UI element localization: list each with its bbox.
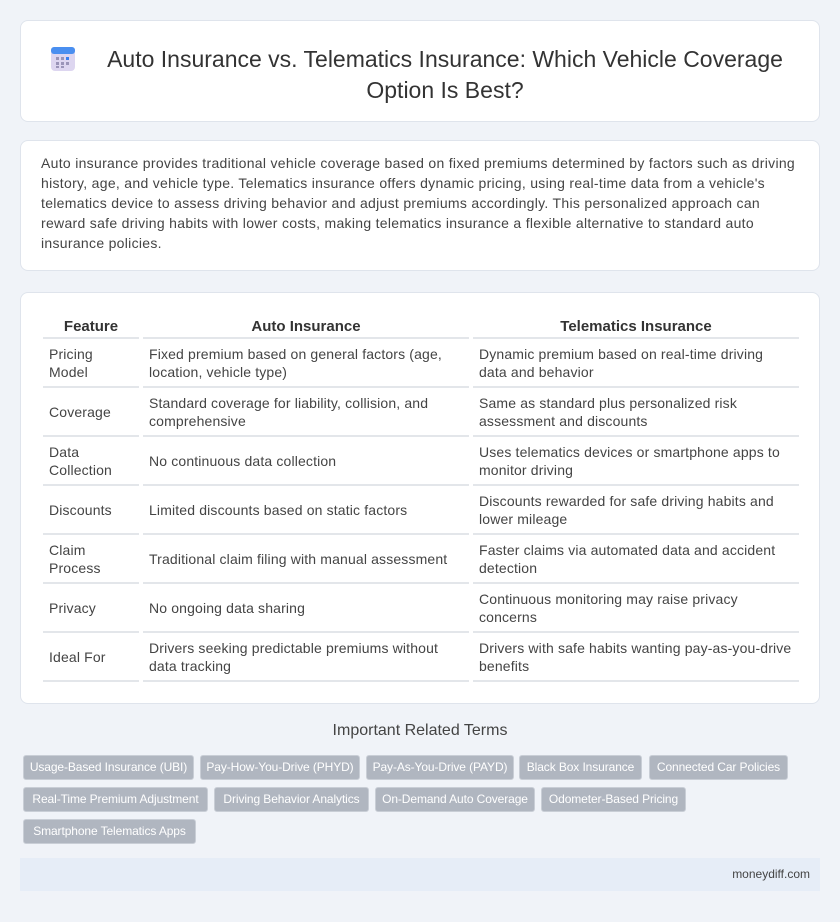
comparison table: Privacy xyxy=(49,600,96,616)
comparison table: Pricing Model xyxy=(49,346,93,380)
related terms tags: Connected Car Policies xyxy=(657,760,780,774)
related terms tags: Pay-How-You-Drive (PHYD) xyxy=(206,760,354,774)
comparison table: Data Collection xyxy=(49,444,112,478)
comparison table: Continuous monitoring may raise privacy concerns xyxy=(479,590,738,624)
footer xyxy=(20,858,820,891)
related terms tags: Smartphone Telematics Apps xyxy=(33,824,186,838)
icon: calendar xyxy=(51,47,75,71)
comparison table: Auto Insurance xyxy=(251,318,361,335)
comparison table xyxy=(43,318,799,682)
comparison table: Ideal For xyxy=(49,648,106,664)
comparison table: Limited discounts based on static factors xyxy=(149,502,407,518)
title: Auto Insurance vs. Telematics Insurance: Which Vehicle Coverage Option Is Best? xyxy=(107,46,783,103)
related terms tags: Driving Behavior Analytics xyxy=(223,792,360,806)
related terms tags: On-Demand Auto Coverage xyxy=(382,792,528,806)
header card xyxy=(20,20,820,122)
description card xyxy=(20,140,820,271)
footer: moneydiff.com xyxy=(732,867,810,881)
comparison table: Coverage xyxy=(49,404,111,420)
related terms heading: Important Related Terms xyxy=(333,722,507,739)
related terms tags: Usage-Based Insurance (UBI) xyxy=(30,760,187,774)
comparison table card xyxy=(20,292,820,704)
comparison table: Telematics Insurance xyxy=(560,318,712,335)
related terms tags: Black Box Insurance xyxy=(527,760,634,774)
comparison table: Discounts xyxy=(49,502,112,518)
description card: Auto insurance provides traditional vehicle coverage based on fixed premiums determined by factors such as driving history, age, and vehicle type. Telematics insurance offers dynamic pricing, using real-time data from a vehicle's telematics device to assess driving behavior and adjust premiums accordingly. This personalized approach can reward safe driving habits with lower costs, making telematics insurance a flexible alternative to standard auto insurance policies. xyxy=(41,155,795,251)
comparison table: Claim Process xyxy=(49,542,101,576)
comparison table: Drivers with safe habits wanting pay-as-you-drive benefits xyxy=(479,640,791,674)
comparison table: No continuous data collection xyxy=(149,452,336,468)
comparison table: Traditional claim filing with manual assessment xyxy=(149,550,447,566)
comparison table: No ongoing data sharing xyxy=(149,600,305,616)
comparison table: Drivers seeking predictable premiums without data tracking xyxy=(149,640,438,674)
comparison table: Feature xyxy=(64,318,118,335)
related terms tags: Pay-As-You-Drive (PAYD) xyxy=(373,760,507,774)
comparison table: Same as standard plus personalized risk assessment and discounts xyxy=(479,394,737,428)
comparison table: Dynamic premium based on real-time driving data and behavior xyxy=(479,346,763,380)
comparison table: Faster claims via automated data and accident detection xyxy=(479,542,775,576)
related terms tags: Real-Time Premium Adjustment xyxy=(32,792,199,806)
comparison table: Discounts rewarded for safe driving habits and lower mileage xyxy=(479,492,774,526)
comparison table: Uses telematics devices or smartphone apps to monitor driving xyxy=(479,444,780,478)
comparison table: Fixed premium based on general factors (age, location, vehicle type) xyxy=(149,346,442,380)
related terms tags: Odometer-Based Pricing xyxy=(549,792,678,806)
comparison table: Standard coverage for liability, collision, and comprehensive xyxy=(149,394,428,428)
